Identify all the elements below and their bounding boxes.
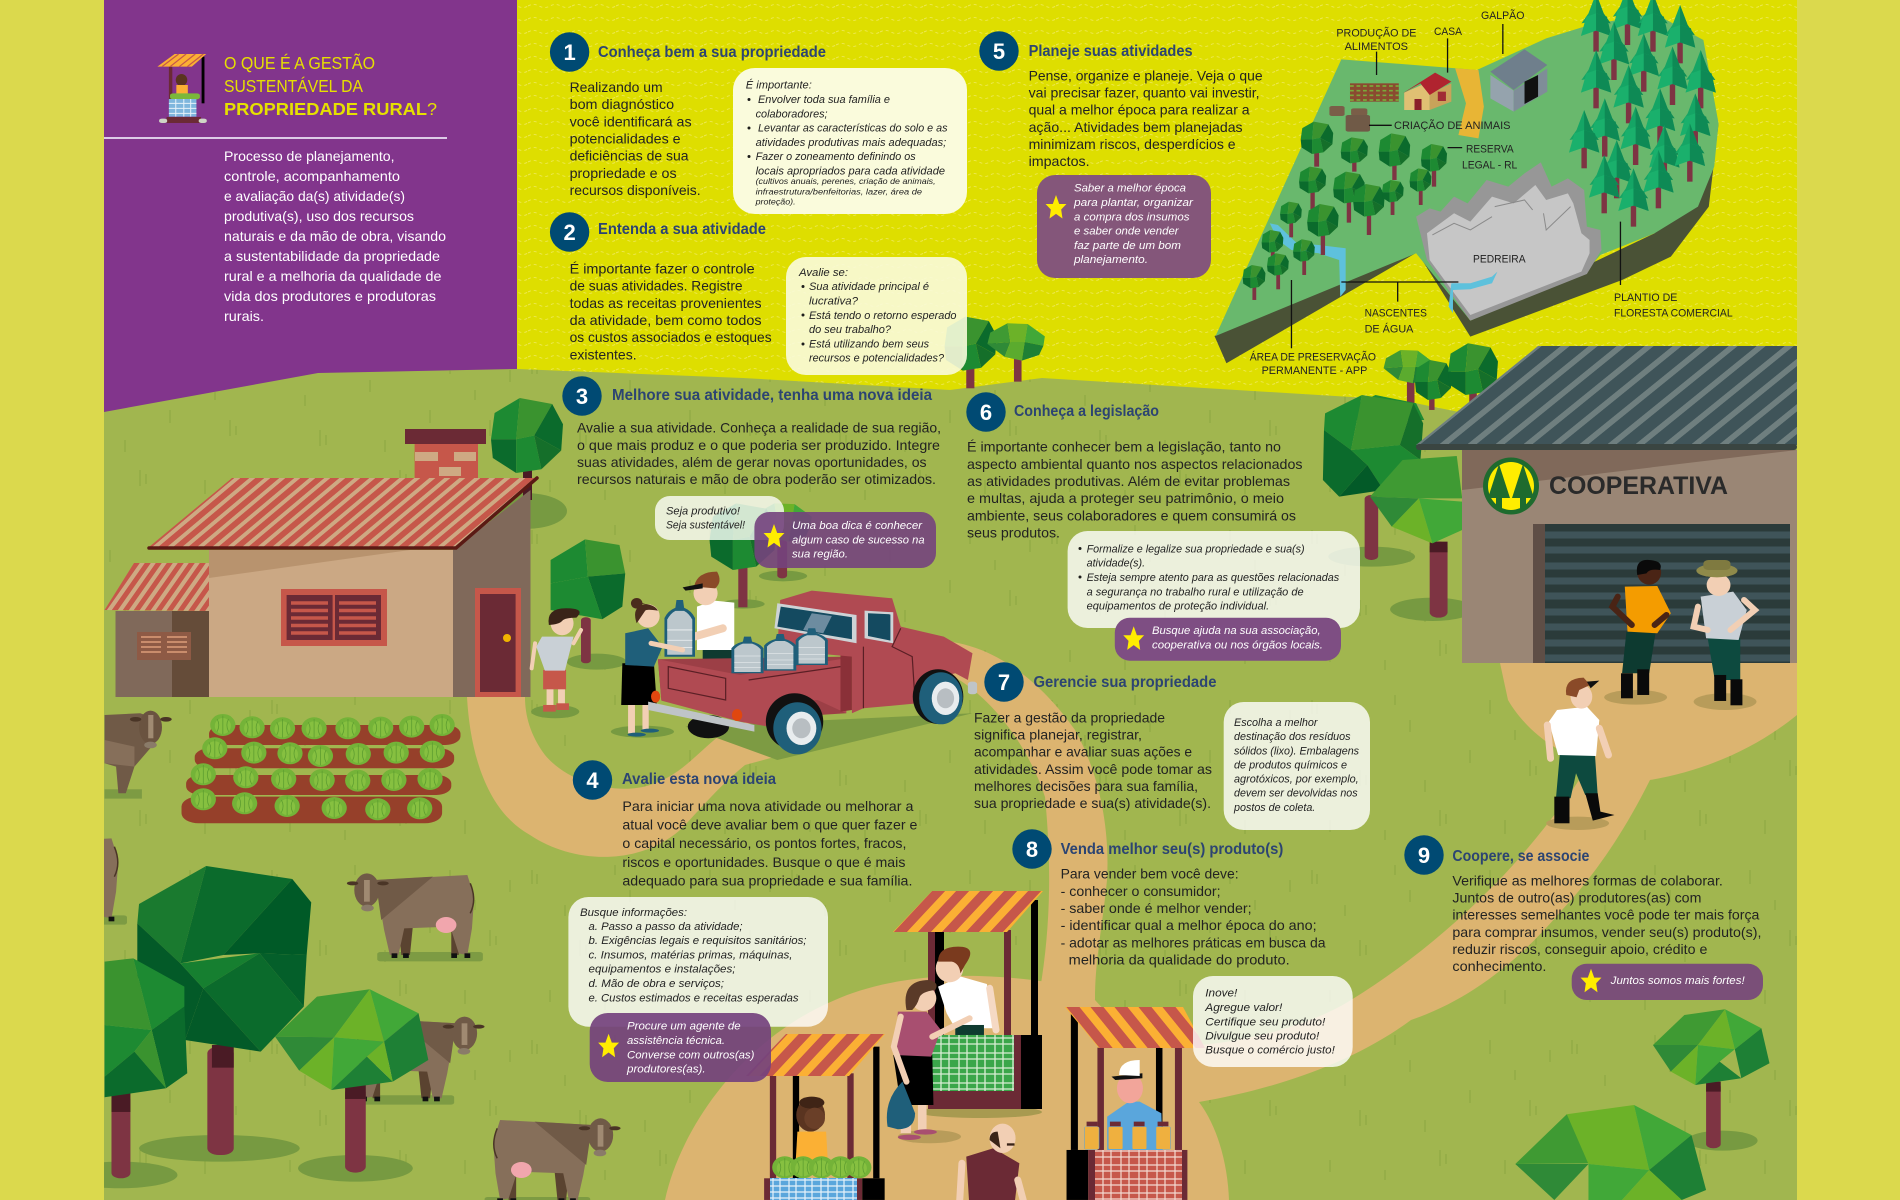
step 7 callout: destinação dos resíduos	[1234, 731, 1351, 743]
step 2 heading: Entenda a sua atividade	[598, 221, 766, 238]
label: legal reserve: RESERVA	[1466, 143, 1514, 155]
step 4 callout	[568, 897, 828, 1027]
step 5 heading: Planeje suas atividades	[1029, 43, 1193, 60]
step 3 slogan bubble	[655, 496, 784, 540]
step 3 tip	[754, 512, 936, 568]
step 1 callout: infraestrutura/benfeitorias, lazer, área de	[756, 186, 922, 196]
step 1 callout: locais apropriados para cada atividade	[756, 166, 945, 178]
step 9 body: reduzir riscos, conseguir apoio, crédito e	[1452, 942, 1707, 957]
step 6 callout: equipamentos de proteção individual.	[1087, 600, 1269, 612]
scene: farmhouse	[105, 398, 567, 697]
panel: step 2	[550, 212, 967, 375]
pickup truck	[648, 591, 977, 754]
house window	[281, 589, 387, 646]
intro paragraph	[224, 149, 446, 324]
step 8 callout: Busque o comércio justo!	[1205, 1045, 1335, 1057]
step 2 callout: lucrativa?	[809, 296, 859, 308]
step 3 heading: Melhore sua atividade, tenha uma nova ideia	[612, 387, 932, 404]
step 4 body: atual você deve avaliar bem o que quer fazer e	[622, 818, 917, 833]
step 1 body	[570, 80, 701, 198]
coop door frame	[1533, 524, 1545, 663]
trees beside cooperative roof	[1325, 343, 1498, 420]
step 6 body: e multas, ajuda a proteger seu patrimônio, o meio	[967, 491, 1284, 506]
map: leader lines	[1291, 24, 1620, 348]
step 6 callout: Formalize e legalize sua propriedade e sua(s)	[1087, 543, 1305, 555]
cow: left edge partial	[0, 837, 127, 925]
step 1 callout: (cultivos anuais, perenes, criação de animais,	[756, 176, 936, 186]
coop logo	[1483, 458, 1539, 514]
panel: step 6	[966, 392, 1360, 661]
map labels	[1250, 9, 1733, 377]
step 8 body: - saber onde é melhor vender;	[1061, 901, 1252, 916]
label: commercial forest: FLORESTA COMERCIAL	[1614, 308, 1733, 320]
label: commercial forest	[1614, 292, 1733, 320]
step 6 number: 6	[980, 400, 992, 425]
step 3 slogan bubble: Seja produtivo!	[666, 505, 740, 517]
intro paragraph: e avaliação da(s) atividade(s)	[224, 189, 405, 204]
label: food production: ALIMENTOS	[1345, 41, 1408, 53]
step 2 callout: do seu trabalho?	[809, 324, 892, 336]
step 6 tip: Busque ajuda na sua associação,	[1152, 625, 1321, 637]
left edge tree	[63, 958, 187, 1188]
step 5 number	[979, 31, 1019, 71]
step 7 callout: agrotóxicos, por exemplo,	[1234, 774, 1359, 786]
step 4 heading: Avalie esta nova ideia	[622, 771, 776, 788]
woman	[611, 598, 683, 738]
step 4 tip	[590, 1013, 771, 1082]
step 1 body: propriedade e os	[570, 166, 677, 181]
title: PROPRIEDADE RURAL	[224, 99, 427, 119]
cow: front view at left edge	[105, 711, 172, 799]
cow: bottom	[485, 1118, 621, 1200]
step 1 body: você identificará as	[570, 114, 692, 129]
step 1 body: Realizando um	[570, 80, 663, 95]
truck shadow	[685, 713, 972, 760]
label: quarry: PEDREIRA	[1473, 253, 1526, 265]
step 5 tip: faz parte de um bom	[1074, 240, 1181, 252]
panel: intro	[104, 52, 447, 324]
step 9 heading: Coopere, se associe	[1452, 848, 1590, 865]
tree beside boy	[551, 539, 626, 670]
step 7 body: Fazer a gestão da propriedade	[974, 710, 1165, 725]
step 8 body: Para vender bem você deve:	[1061, 867, 1239, 882]
label: permanent preservation area	[1250, 351, 1376, 377]
step 4 body: o capital necessário, os pontos fortes, fracos,	[622, 836, 906, 851]
step 4 number	[573, 760, 612, 800]
step 8 callout: Agregue valor!	[1204, 1002, 1282, 1014]
step 5 body: minimizam riscos, desperdícios e	[1029, 137, 1236, 152]
label: food production: PRODUÇÃO DE	[1336, 27, 1416, 40]
step 8 heading: Venda melhor seu(s) produto(s)	[1061, 841, 1283, 858]
tree behind house	[483, 398, 567, 529]
step 6 callout	[1068, 531, 1360, 628]
panel: step 7	[974, 662, 1370, 830]
map: pine plantation	[1569, 0, 1716, 227]
step 4 number: 4	[586, 768, 599, 793]
step 2 body: É importante fazer o controle	[570, 262, 755, 276]
dirt road: market plaza and path to cooperative	[665, 663, 1797, 1200]
step 6 tip: cooperativa ou nos órgãos locais.	[1152, 639, 1323, 651]
sky texture	[517, 0, 1797, 450]
step 4 body: Para iniciar uma nova atividade ou melhorar a	[622, 799, 914, 814]
map: water springs	[1270, 223, 1497, 313]
step 1 body: potencialidades e	[570, 132, 681, 146]
large milk can	[664, 600, 695, 657]
step 7 body: melhores decisões para sua família,	[974, 779, 1198, 794]
step 1 callout: Envolver toda sua família e	[758, 94, 890, 106]
step 2 callout: recursos e potencialidades?	[809, 353, 945, 365]
blue cloth on lower left stall	[770, 1178, 857, 1200]
step 8 body: - identificar qual a melhor época do ano;	[1061, 918, 1317, 933]
step 5 body: vai precisar fazer, quanto vai investir,	[1029, 86, 1260, 100]
label: permanent preservation area: PERMANENTE - APP	[1262, 365, 1367, 377]
map: farm zoning illustration	[1214, 0, 1719, 363]
title: O QUE É A GESTÃO	[224, 52, 375, 73]
step 2 callout	[786, 257, 967, 375]
cow: pasture centre	[347, 873, 483, 961]
step 6 tip	[1115, 618, 1341, 661]
panel: step 4	[568, 760, 917, 1082]
tree: bottom large	[1515, 1105, 1706, 1200]
house door	[475, 588, 521, 697]
step 3 body: Avalie a sua atividade. Conheça a realidade de sua região,	[577, 421, 941, 436]
step 8 body: melhoria da qualidade do produto.	[1069, 952, 1290, 968]
man at upper stall	[936, 947, 996, 1035]
panel: step 1	[550, 32, 967, 214]
step 2 callout: Está tendo o retorno esperado	[809, 310, 956, 322]
label: water springs: NASCENTES	[1365, 308, 1427, 320]
light green tree	[275, 989, 428, 1182]
cows in the pasture	[0, 837, 621, 1200]
step 2 body: existentes.	[570, 347, 637, 362]
map: legal reserve and riparian trees	[1243, 122, 1447, 300]
intro paragraph: vida dos produtores e produtoras	[224, 289, 436, 304]
label: house: CASA	[1434, 26, 1463, 38]
step 1 body: deficiências de sua	[570, 149, 689, 164]
man in orange shirt	[1604, 560, 1671, 705]
step 3 slogan bubble: Seja sustentável!	[666, 519, 745, 531]
coop roof	[1416, 346, 1797, 445]
step 9 body: interesses semelhantes você pode ter mais força	[1452, 908, 1760, 923]
step 4 tip: Procure um agente de	[627, 1021, 741, 1033]
scene: cooperative building	[1323, 346, 1797, 830]
red cloth on lower right stall	[1095, 1150, 1182, 1200]
house front wall	[209, 550, 453, 697]
step 3 tip: sua região.	[792, 549, 848, 561]
panel: step 8	[1012, 829, 1353, 1067]
step 4 tip: produtores(as).	[626, 1063, 706, 1075]
step 1 callout	[733, 68, 967, 214]
trees near step 3	[551, 503, 812, 670]
step 5 tip: planejamento.	[1073, 254, 1148, 266]
step 9 body: Verifique as melhores formas de colaborar.	[1452, 873, 1723, 888]
step 7 callout: postos de coleta.	[1233, 802, 1315, 814]
step 7 number	[984, 662, 1024, 702]
tree behind tip boxes	[710, 503, 812, 609]
bald man	[960, 1124, 1023, 1200]
intro paragraph: controle, acompanhamento	[224, 169, 400, 184]
step 9 number	[1404, 835, 1444, 875]
map: house	[1403, 73, 1451, 110]
step 7 callout: sólidos (lixo). Embalagens	[1234, 745, 1359, 757]
step 9 body: conhecimento.	[1452, 959, 1546, 974]
scene: farmers market	[746, 891, 1205, 1200]
step 1 callout: atividades produtivas mais adequadas;	[756, 137, 946, 149]
step 5 tip	[1037, 175, 1211, 278]
step 6 body: seus produtos.	[967, 526, 1060, 540]
step 4 tip: assistência técnica.	[627, 1035, 725, 1047]
step 8 body: - adotar as melhores práticas em busca da	[1061, 935, 1326, 950]
step 6 callout: Esteja sempre atento para as questões relacionadas	[1087, 572, 1340, 584]
left margin band	[0, 0, 104, 1200]
step 3 number	[562, 376, 602, 416]
title rule	[104, 137, 447, 139]
label: food production	[1336, 27, 1416, 53]
step 5 body: qual a melhor época para realizar a	[1029, 103, 1250, 118]
step 2 body	[570, 262, 772, 362]
step 6 body: aspecto ambiental quanto nos aspectos relacionados	[967, 457, 1303, 472]
woman with bag	[887, 980, 970, 1143]
step 3 body: o que mais produz e o que poderia ser produzido. Integre	[577, 438, 940, 453]
step 4 body	[622, 799, 917, 888]
cabbage field	[182, 714, 460, 823]
big dark tree	[137, 866, 311, 1162]
step 5 tip: e saber onde vender	[1074, 226, 1180, 238]
step 2 body: todas as receitas provenientes	[570, 296, 762, 311]
panel: step 9	[1404, 835, 1763, 1000]
step 5 body	[1029, 68, 1263, 169]
step 3 number: 3	[576, 384, 588, 409]
title: SUSTENTÁVEL DA	[224, 76, 363, 96]
title	[224, 52, 437, 119]
roof of lower left stall	[746, 1034, 885, 1076]
step 9 body	[1452, 873, 1761, 974]
scene: family loading milk cans into pickup truck	[531, 572, 977, 760]
house roof	[149, 478, 537, 548]
step 6 heading: Conheça a legislação	[1014, 403, 1159, 420]
icon: market stall	[157, 54, 207, 123]
step 1 callout: É importante:	[746, 79, 812, 92]
step 2 number: 2	[563, 220, 576, 245]
map: shed	[1490, 49, 1547, 112]
step 4 callout: Busque informações:	[580, 907, 687, 919]
step 4 callout: equipamentos e instalações;	[588, 964, 736, 976]
step 2 body: de suas atividades. Registre	[570, 279, 743, 294]
panel: step 5	[979, 31, 1263, 278]
label: legal reserve: LEGAL - RL	[1462, 159, 1517, 171]
step 8 callout: Certifique seu produto!	[1205, 1016, 1325, 1028]
panel: step 3	[562, 376, 941, 568]
step 1 callout: colaboradores;	[756, 108, 828, 120]
step 3 tip: algum caso de sucesso na	[792, 535, 925, 547]
step 8 body	[1061, 867, 1326, 968]
step 8 body: - conhecer o consumidor;	[1061, 884, 1221, 899]
step 2 number	[550, 212, 589, 252]
step 1 callout: proteção).	[755, 196, 796, 206]
step 2 callout: Sua atividade principal é	[809, 281, 929, 293]
step 6 body: É importante conhecer bem a legislação, tanto no	[967, 440, 1281, 455]
step 5 tip: Saber a melhor época	[1074, 183, 1186, 195]
step 4 callout: e. Custos estimados e receitas esperadas	[588, 992, 799, 1004]
step 7 heading: Gerencie sua propriedade	[1034, 674, 1217, 691]
label: water springs	[1365, 308, 1427, 336]
step 4 callout: d. Mão de obra e serviços;	[588, 978, 724, 990]
map: terrain surface	[1216, 13, 1719, 336]
coop eave	[1416, 444, 1797, 450]
step 9 body: para comprar insumos, vender seu(s) produto(s),	[1452, 925, 1761, 940]
step 2 callout: Avalie se:	[798, 267, 848, 279]
step 7 callout: devem ser devolvidas nos	[1234, 788, 1358, 800]
step 6 callout: a segurança no trabalho rural e utilização de	[1087, 586, 1304, 598]
bottom right trees	[1515, 1009, 1770, 1200]
map: quarry	[1416, 162, 1601, 321]
dirt road: house to truck	[467, 697, 800, 857]
dirt road: truck to market	[930, 640, 1108, 1000]
boy	[531, 608, 581, 718]
step 1 heading: Conheça bem a sua propriedade	[598, 44, 826, 61]
step 5 body: ação... Atividades bem planejadas	[1029, 120, 1243, 135]
step 1 body: bom diagnóstico	[570, 97, 674, 112]
step 1 callout: Fazer o zoneamento definindo os	[756, 151, 916, 163]
step 2 callout: Está utilizando bem seus	[809, 338, 929, 350]
step 4 callout: b. Exigências legais e requisitos sanitários;	[588, 935, 806, 947]
step 3 body: recursos naturais e mão de obra poderão ser otimizados.	[577, 472, 936, 487]
step 4 body: adequado para sua propriedade e sua família.	[622, 873, 912, 888]
coop side trees	[1323, 395, 1475, 621]
step 8 callout: Divulgue seu produto!	[1205, 1030, 1319, 1042]
label: water springs: DE ÁGUA	[1365, 323, 1414, 336]
milk cans on truck	[731, 628, 828, 673]
step 3 body	[577, 421, 941, 487]
intro paragraph: produtiva(s), uso dos recursos	[224, 209, 414, 224]
step 4 tip: Converse com outros(as)	[627, 1049, 755, 1061]
house wall shadow	[209, 550, 410, 578]
right margin band	[1797, 0, 1900, 1200]
step 5 number: 5	[993, 39, 1005, 64]
step 1 number: 1	[563, 40, 576, 65]
step 7 callout: Escolha a melhor	[1234, 717, 1319, 729]
step 8 number: 8	[1026, 837, 1038, 862]
cow: behind light tree	[349, 1017, 485, 1105]
step 1 body: recursos disponíveis.	[570, 183, 701, 198]
label: animals: CRIAÇÃO DE ANIMAIS	[1394, 119, 1510, 132]
step 5 body: Pense, organize e planeje. Veja o que	[1029, 68, 1263, 83]
intro paragraph: naturais e da mão de obra, visando	[224, 229, 446, 244]
step 8 callout: Inove!	[1205, 988, 1237, 1000]
grass texture	[104, 369, 1797, 1200]
step 6 body	[967, 440, 1303, 540]
label: commercial forest: PLANTIO DE	[1614, 292, 1677, 304]
step 2 body: da atividade, bem como todos	[570, 313, 762, 328]
big trees, bottom left	[63, 866, 428, 1188]
intro paragraph: rural e a melhoria da qualidade de	[224, 269, 442, 284]
coop wall	[1462, 450, 1797, 663]
step 7 body: significa planejar, registrar,	[974, 728, 1142, 742]
stall: lower left with blue cloth	[764, 1047, 885, 1200]
step 5 body: impactos.	[1029, 154, 1090, 169]
step 1 number	[550, 32, 589, 72]
step 6 body: as atividades produtivas. Além de evitar problemas	[967, 474, 1290, 489]
panel: purple intro background	[104, 0, 517, 420]
step 4 callout: a. Passo a passo da atividade;	[588, 921, 742, 933]
label: shed: GALPÃO	[1481, 9, 1524, 22]
step 9 tip: Juntos somos mais fortes!	[1610, 975, 1745, 987]
walking man	[1546, 678, 1614, 830]
man in hat	[1694, 560, 1756, 710]
trees behind step 2 box	[945, 317, 1045, 388]
step 8 number	[1012, 829, 1052, 869]
green hills	[104, 369, 1797, 1200]
step 4 callout: c. Insumos, matérias primas, máquinas,	[588, 950, 792, 962]
step 1 callout: Levantar as características do solo e as	[758, 123, 948, 135]
stall: upper with green cloth	[893, 891, 1043, 1118]
intro paragraph: rurais.	[224, 309, 264, 324]
stall: lower right with red cloth	[1067, 1013, 1187, 1200]
step 7 number: 7	[998, 670, 1010, 695]
people at cooperative	[1546, 560, 1756, 830]
tree: right	[1653, 1009, 1770, 1151]
step 7 body: atividades. Assim você pode tomar as	[974, 762, 1212, 777]
step 6 number	[966, 392, 1006, 432]
intro paragraph: a sustentabilidade da propriedade	[224, 249, 440, 264]
man with cap	[683, 572, 734, 672]
step 7 body: sua propriedade e sua(s) atividade(s).	[974, 796, 1211, 811]
step 7 body	[974, 710, 1212, 811]
step 9 tip	[1572, 964, 1763, 1000]
title: ?	[427, 99, 437, 119]
map: animals	[1329, 106, 1370, 132]
house side wall	[453, 490, 530, 697]
step 7 callout	[1224, 702, 1370, 830]
chimney	[405, 429, 486, 483]
step 5 tip: a compra dos insumos	[1074, 211, 1190, 223]
step 6 callout: atividade(s).	[1087, 557, 1145, 569]
step 6 body: ambiente, seus colaboradores e quem consumirá os	[967, 508, 1296, 523]
step 9 body: Juntos de outro(as) produtores(as) com	[1452, 890, 1701, 906]
step 9 number: 9	[1418, 843, 1430, 868]
step 3 body: suas atividades, além de gerar novas oportunidades, os	[577, 455, 927, 470]
annex	[105, 563, 209, 697]
step 7 callout: de produtos químicos e	[1234, 759, 1347, 771]
step 5 tip: para plantar, organizar	[1073, 197, 1194, 209]
coop wall shade	[1462, 450, 1797, 490]
step 8 callout	[1193, 976, 1353, 1067]
label: legal reserve	[1462, 143, 1517, 171]
step 4 body: riscos e oportunidades. Busque o que é mais	[622, 855, 906, 870]
roof of lower right stall	[1065, 1007, 1205, 1048]
coop sign: COOPERATIVA	[1549, 472, 1728, 500]
label: permanent preservation area: ÁREA DE PRESERVAÇÃO	[1250, 351, 1376, 364]
step 3 tip: Uma boa dica é conhecer	[792, 520, 923, 532]
step 7 body: acompanhar e avaliar suas ações e	[974, 745, 1192, 760]
map: food field	[1350, 83, 1399, 102]
step 2 body: os custos associados e estoques	[570, 330, 772, 345]
intro paragraph: Processo de planejamento,	[224, 149, 394, 164]
coop rolling door	[1545, 524, 1790, 663]
map: dirt road	[1455, 68, 1484, 138]
map: terrain side	[1214, 123, 1719, 363]
